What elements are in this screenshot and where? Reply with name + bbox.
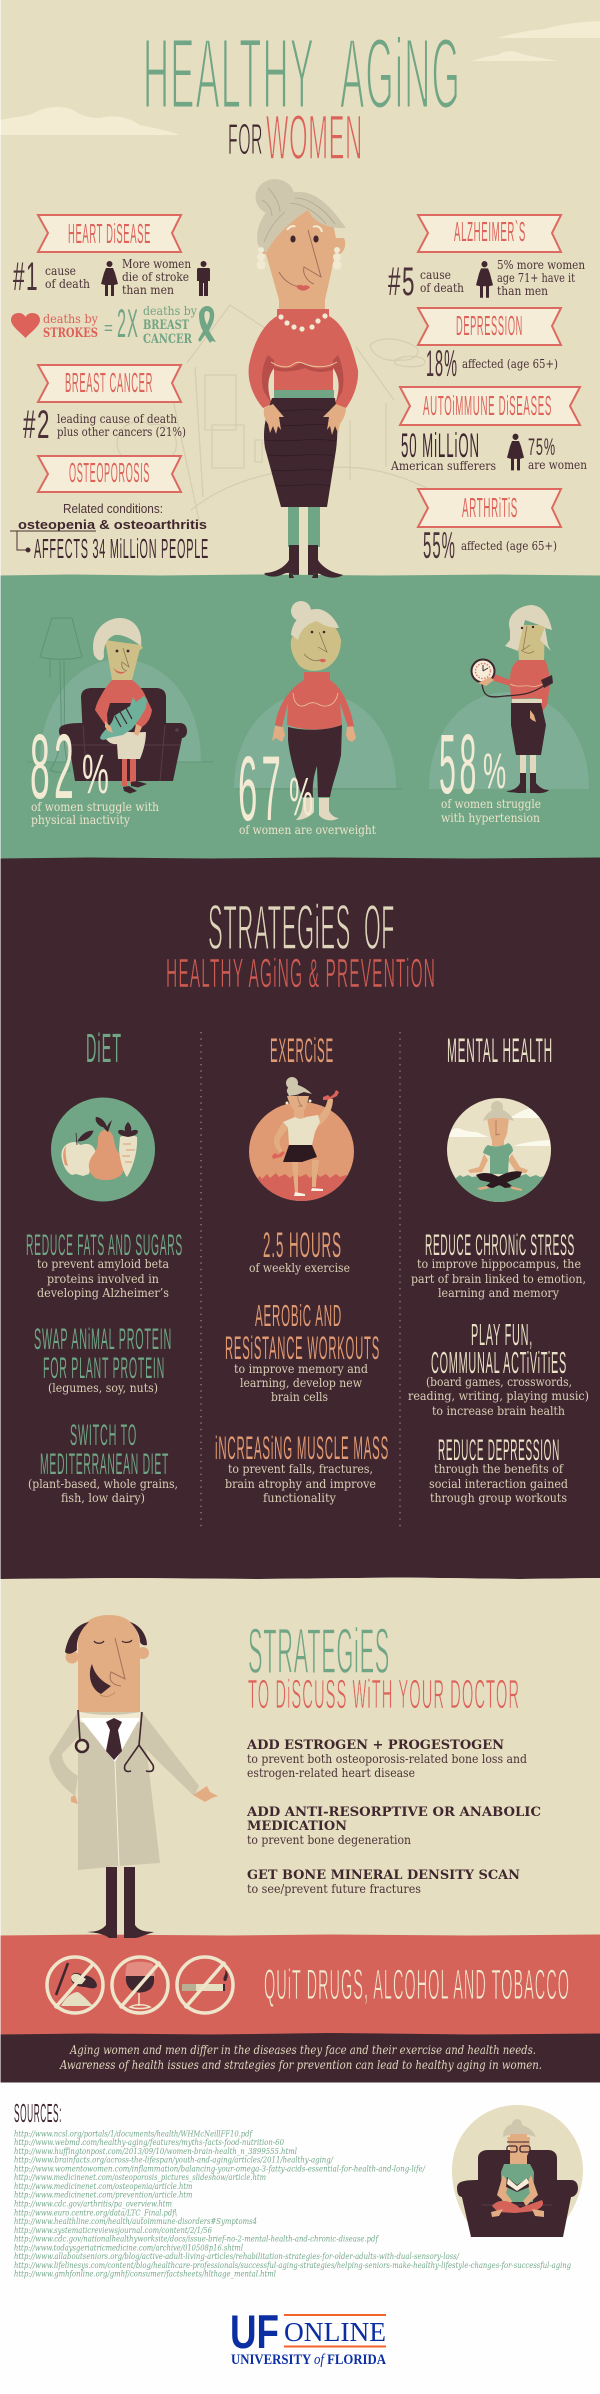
list: source links: http://www.euro.centre.org/data/LTC_Final.pdf\ <box>14 2208 177 2217</box>
stat: number one cause of death <box>13 255 90 299</box>
stat: number two leading cause <box>23 403 186 447</box>
text: add anti-resorptive or anabolic medication <box>246 1805 541 1847</box>
list: source links: http://www.brainfacts.org/across-the-lifespan/youth-and-aging/articles/2011/healthy-aging/ <box>14 2156 334 2165</box>
illustration: exercising woman <box>249 1077 354 1203</box>
logo: UF Online University of Florida: UF <box>230 2305 279 2358</box>
list: source links: http://www.cdc.gov/arthritis/pa_overview.htm <box>14 2200 172 2208</box>
dome <box>234 692 396 788</box>
illustration: woman in armchair <box>59 618 187 794</box>
stat: 82 percent: physical inactivity <box>31 812 131 827</box>
panel: diet <box>26 1025 183 1505</box>
text: add estrogen and progestogen: estrogen-related heart disease <box>247 1765 415 1780</box>
panel: osteoporosis: OSTEOPOROSIS <box>69 457 150 488</box>
text: more women die of stroke: More women <box>122 256 191 271</box>
text: more women die of stroke: than men <box>122 282 174 297</box>
stat: 82 percent: % <box>82 742 111 805</box>
section: green background <box>0 574 600 860</box>
stat: 18 percent: 18% <box>426 343 458 384</box>
text: aerobic and resistance workouts: brain cells <box>271 1389 328 1404</box>
section: dark conclusion band <box>0 2033 600 2082</box>
text: deaths by strokes <box>43 311 99 341</box>
icon: ribbon <box>198 306 216 343</box>
text: related conditions <box>18 501 207 532</box>
text: aerobic and resistance workouts: learning, develop new <box>240 1375 362 1390</box>
text: five percent more women: than men <box>497 283 548 298</box>
section: coral quit band <box>0 1934 600 2036</box>
logo: UF Online University of Florida <box>230 2305 386 2368</box>
illustration: woman with blood pressure gauge <box>472 605 553 793</box>
panel: physical inactivity <box>27 618 214 827</box>
text: reduce depression: social interaction gained <box>429 1476 568 1491</box>
panel: arthritis <box>418 489 561 566</box>
text: switch to mediterranean diet: SWITCH TO <box>70 1419 137 1452</box>
text: aerobic and resistance workouts: AEROBiC AND <box>255 1298 342 1333</box>
text: swap animal protein <box>34 1323 172 1395</box>
stat: 75 percent: 75% <box>528 434 556 461</box>
panel: autoimmune diseases: 50 MiLLiON <box>401 427 480 465</box>
text: play fun communal activities: (board games, crosswords, <box>426 1374 572 1389</box>
text: switch to mediterranean diet <box>28 1419 178 1505</box>
text: reduce fats and sugars: proteins involved in <box>47 1271 159 1286</box>
text: reduce fats and sugars <box>26 1229 183 1300</box>
text: deaths by breast cancer: deaths by <box>143 303 198 318</box>
logo: UF Online University of Florida: UNIVERSITY of FLORIDA <box>231 2352 386 2368</box>
section: cream doctor background <box>0 1578 600 1940</box>
list: source links: http://www.medicinenet.com/prevention/article.htm <box>14 2191 193 2200</box>
stat: number one cause of death: #1 <box>13 255 39 299</box>
stat: 75 percent: are women <box>528 457 587 472</box>
text: SWAP ANiMAL PROTEIN <box>34 1323 172 1356</box>
list: source links: http://www.allaboutseniors.org/blog/active-adult-living-articles/rehabilitation-strategies-for-older-adults-with-dual-sensory-loss/ <box>14 2252 460 2261</box>
heading: strategies of healthy aging and prevention: OF <box>364 893 395 963</box>
stat: 58 percent: 58 <box>439 717 480 811</box>
icon: lamp <box>40 618 82 772</box>
icon: woman <box>101 261 118 296</box>
stat: number two leading cause: plus other cancers (21%) <box>57 424 186 439</box>
text: reduce fats and sugars: developing Alzheimer’s <box>37 1285 169 1300</box>
list: source links: http://www.webmd.com/healthy-aging/features/myths-facts-food-nutrition-60 <box>14 2138 284 2147</box>
text: switch to mediterranean diet: fish, low dairy) <box>61 1490 145 1505</box>
title <box>143 18 461 173</box>
icon: woman <box>507 434 524 470</box>
list: source links: http://www.healthline.com/health/autoimmune-disorders#Symptoms4 <box>14 2217 257 2226</box>
stat: 67 percent: % <box>289 767 315 827</box>
text: five percent more women <box>497 257 585 298</box>
list: source links: http://www.medicinenet.com/osteoporosis_pictures_slideshow/article.htm <box>14 2173 266 2182</box>
stat: number two leading cause: leading cause of death <box>57 411 177 426</box>
text: deaths by strokes: STROKES <box>43 326 98 341</box>
list: source links: http://www.systematicreviewsjournal.com/content/2/1/56 <box>14 2226 212 2235</box>
list: source links <box>14 2129 571 2279</box>
text: reduce chronic stress: to improve hippocampus, the <box>417 1256 581 1271</box>
text: add anti-resorptive or anabolic medication: ADD ANTI-RESORPTIVE OR ANABOLIC <box>246 1805 541 1820</box>
stat: number five cause of death: #5 <box>388 260 416 304</box>
text: add estrogen and progestogen: ADD ESTROGEN + PROGESTOGEN <box>246 1738 504 1753</box>
illustration: doctor <box>49 1615 218 1938</box>
icon: no tobacco <box>177 1957 233 2013</box>
text: add estrogen and progestogen <box>246 1738 527 1780</box>
heading: strategies of healthy aging and prevention <box>166 893 436 996</box>
stat: 18 percent: affected (age 65+) <box>462 356 558 371</box>
text: FOR PLANT PROTEIN <box>43 1352 165 1385</box>
text: MEDITERRANEAN DIET <box>40 1448 169 1481</box>
doctor shoes over band <box>87 1928 154 1938</box>
banner: osteoporosis <box>38 456 181 492</box>
boots over the green band <box>264 568 343 578</box>
text: play fun communal activities <box>408 1317 589 1418</box>
icon: woman <box>476 261 493 298</box>
text: increasing muscle mass: to prevent falls, fractures, <box>228 1461 373 1476</box>
text: add anti-resorptive or anabolic medication: to prevent bone degeneration <box>247 1832 411 1847</box>
banner: autoimmune diseases <box>400 387 580 425</box>
list: source links: http://www.womentowomen.com/inflammation/balancing-your-omega-3-fatty-acids-essential-for-health-and-long-life/ <box>14 2164 426 2173</box>
text: BREAST CANCER <box>65 367 153 398</box>
text: add estrogen and progestogen: to prevent both osteoporosis-related bone loss and <box>247 1751 527 1766</box>
stat: 75 percent <box>528 434 587 472</box>
text: deaths by strokes: deaths by <box>43 311 99 326</box>
panel: breast cancer <box>23 365 186 447</box>
text: increasing muscle mass: functionality <box>263 1490 337 1505</box>
panel: osteoporosis <box>10 456 209 564</box>
panel: exercise: EXERCiSE <box>270 1032 334 1070</box>
text: REDUCE FATS AND SUGARS <box>26 1229 183 1262</box>
banner: heart disease <box>38 215 181 252</box>
panel: diet: DiET <box>86 1025 122 1071</box>
section: white sources background <box>0 2083 600 2394</box>
section: dark strategies background <box>0 858 600 1579</box>
text: more women die of stroke <box>122 256 191 297</box>
text: swap animal protein: (legumes, soy, nuts) <box>48 1380 158 1395</box>
icon: no drugs <box>47 1957 103 2013</box>
panel: mental health <box>408 1032 589 1505</box>
stat: 67 percent: of women are overweight <box>239 822 376 837</box>
text: switch to mediterranean diet: (plant-based, whole grains, <box>28 1476 178 1491</box>
list: source links: http://www.medicinenet.com/osteopenia/article.htm <box>14 2182 193 2191</box>
stat: 82 percent: of women struggle with <box>31 799 159 814</box>
stat: 58 percent: of women struggle <box>441 796 541 811</box>
house sketch background <box>117 305 436 525</box>
list: source links: http://www.cdc.gov/nationalhealthyworksite/docs/issue-brief-no-2-mental-health-and-chronic-disease.pdf <box>14 2235 380 2244</box>
text: AFFECTS 34 MiLLiON PEOPLE <box>34 533 209 564</box>
text: reduce depression <box>429 1434 568 1505</box>
illustration: woman reading in armchair <box>452 2105 583 2237</box>
text: equals 2x <box>104 302 139 346</box>
section: cream header background <box>0 0 600 580</box>
list: source links: http://www.huffingtonpost.com/2013/09/10/women-brain-health_n_3899555.html <box>14 2147 297 2156</box>
text: 2.5 hours <box>249 1226 350 1275</box>
stat: number one cause of death: cause <box>45 263 76 278</box>
stat: 58 percent: % <box>483 743 508 799</box>
clouds <box>0 21 600 135</box>
text: related conditions: osteopenia & osteoarthritis <box>18 517 207 532</box>
stat: number five cause of death: of death <box>420 280 464 295</box>
stat: 55 percent <box>423 525 557 566</box>
connector line <box>10 531 96 552</box>
text: increasing muscle mass <box>215 1430 389 1505</box>
text: equals 2x: = <box>104 318 114 338</box>
banner: alzheimers <box>418 215 561 252</box>
stat: 18 percent <box>426 343 558 384</box>
text: get bone mineral density scan <box>247 1868 520 1896</box>
text: more women die of stroke: die of stroke <box>122 269 189 284</box>
logo: UF Online University of Florida: ONLINE <box>284 2317 386 2347</box>
text: play fun communal activities: to increase brain health <box>432 1403 565 1418</box>
text: add anti-resorptive or anabolic medication: MEDICATION <box>247 1819 347 1834</box>
text: reduce chronic stress: learning and memory <box>438 1285 560 1300</box>
stat: 50 million <box>390 427 496 473</box>
stat: number five cause of death <box>388 260 464 304</box>
title: FOR <box>228 115 263 164</box>
illustration: meditating woman <box>447 1098 552 1204</box>
panel: autoimmune diseases <box>390 387 587 473</box>
stat: 55 percent: 55% <box>423 525 456 566</box>
stat: 50 million: American sufferers <box>390 458 496 473</box>
panel: hypertension <box>429 605 589 825</box>
text: deaths by breast cancer: CANCER <box>143 332 192 347</box>
illustration: main woman <box>249 179 358 578</box>
icon: no alcohol <box>112 1957 168 2013</box>
text: reduce fats and sugars: to prevent amyloid beta <box>37 1256 169 1271</box>
stat: number five cause of death: cause <box>420 267 451 282</box>
heading: strategies to discuss with your doctor <box>248 1615 520 1717</box>
text: reduce depression: through the benefits of <box>434 1461 564 1476</box>
banner: depression <box>418 308 561 345</box>
illustration: overweight woman <box>272 601 356 820</box>
stat: 67 percent: 67 <box>238 738 285 840</box>
text: reduce chronic stress <box>411 1229 586 1300</box>
icon: man <box>197 261 210 296</box>
banner: arthritis <box>418 489 561 527</box>
text: related conditions: Related conditions: <box>63 501 163 516</box>
text: increasing muscle mass: brain atrophy and improve <box>225 1476 376 1491</box>
panel: exercise: 2.5 HOURS <box>263 1226 342 1265</box>
dome <box>40 659 201 762</box>
icon: fruit and vegetables <box>51 1098 155 1202</box>
panel: exercise <box>215 1032 389 1505</box>
panel: overweight <box>234 601 402 840</box>
text: 2.5 hours: of weekly exercise <box>249 1260 350 1275</box>
stat: number two leading cause: #2 <box>23 403 51 447</box>
text: reduce depression: through group workouts <box>430 1490 567 1505</box>
text: aerobic and resistance workouts <box>225 1298 380 1404</box>
text: deaths by breast cancer <box>143 303 198 347</box>
icon: heart <box>11 313 40 338</box>
text: SOURCES: <box>14 2098 62 2128</box>
stat: 55 percent: affected (age 65+) <box>461 538 557 553</box>
list: source links: http://www.gmhfonline.org/gmhf/consumer/factsheets/hlthage_mental.html <box>14 2270 276 2279</box>
text: five percent more women: age 71+ have it <box>497 270 575 285</box>
text: get bone mineral density scan: to see/prevent future fractures <box>247 1881 421 1896</box>
text: deaths by breast cancer: BREAST <box>143 318 189 333</box>
panel: alzheimers <box>388 215 585 304</box>
text: get bone mineral density scan: GET BONE MINERAL DENSITY SCAN <box>247 1868 520 1883</box>
list: source links: http://www.ncsl.org/portals/1/documents/health/WHMcNeillFF10.pdf <box>14 2129 254 2138</box>
title: WOMEN <box>266 103 363 173</box>
panel: heart disease: 2X <box>117 302 139 346</box>
text: five percent more women: 5% more women <box>497 257 585 272</box>
dome <box>429 692 589 789</box>
list: source links: http://www.todaysgeriatricmedicine.com/archive/010508p16.shtml <box>14 2243 243 2252</box>
panel: depression <box>418 308 561 384</box>
stat: 58 percent: with hypertension <box>441 810 540 825</box>
banner: breast cancer <box>38 365 181 402</box>
text: aerobic and resistance workouts: to improve memory and <box>234 1361 368 1376</box>
stat: 82 percent: 82 <box>30 716 78 818</box>
panel: heart disease <box>11 215 216 347</box>
panel: heart disease: HEART DiSEASE <box>68 218 151 249</box>
stat: number one cause of death: of death <box>45 276 90 291</box>
